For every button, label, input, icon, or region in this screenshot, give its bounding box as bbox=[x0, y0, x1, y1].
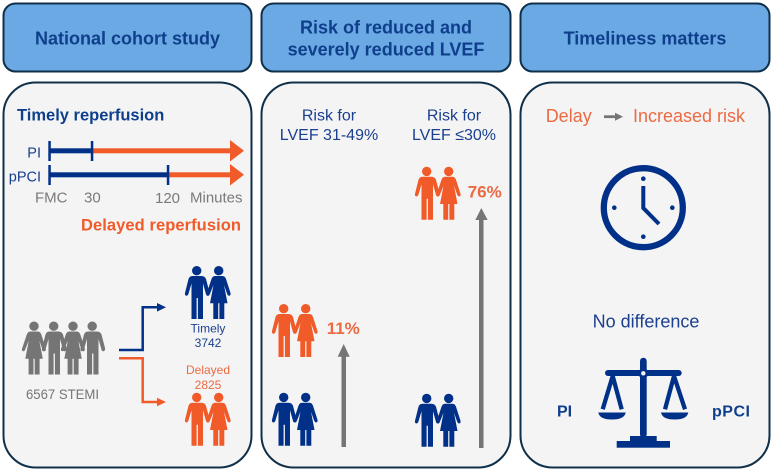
label: no difference: No difference bbox=[593, 312, 699, 332]
header: timeliness matters bbox=[520, 4, 770, 72]
heading: timely reperfusion: Timely reperfusion bbox=[17, 107, 164, 125]
label: timely 3742 bbox=[191, 322, 225, 350]
label: timely 3742: Timely bbox=[191, 322, 225, 336]
icon: 6567 STEMI group bbox=[22, 322, 105, 374]
icon: clock bbox=[604, 168, 683, 247]
icon: orange couple right bbox=[415, 167, 461, 220]
label: risk for LVEF 30% or less bbox=[412, 108, 496, 144]
label: risk for LVEF 31-49%: Risk for bbox=[302, 108, 357, 125]
timeline chart bbox=[9, 140, 244, 207]
label: pPCI: pPCI bbox=[712, 404, 750, 421]
header: risk of reduced LVEF: Risk of reduced and bbox=[300, 17, 472, 37]
icon: balance scale bbox=[598, 358, 688, 448]
arrow: to timely group bbox=[119, 303, 166, 350]
arrow: short risk increase bbox=[338, 344, 350, 447]
label: delayed 2825: Delayed bbox=[186, 363, 230, 377]
icon: blue couple right bbox=[415, 394, 461, 447]
timeline chart: 120 bbox=[155, 190, 180, 207]
label: risk for LVEF 31-49%: LVEF 31-49% bbox=[280, 127, 378, 144]
label: delayed 2825 bbox=[186, 363, 230, 392]
arrow: to delayed group bbox=[119, 358, 166, 406]
timeline chart: 30 bbox=[84, 190, 101, 207]
label: PI: PI bbox=[557, 404, 572, 421]
label: timely 3742: 3742 bbox=[195, 336, 222, 350]
value: 76%: 76% bbox=[468, 183, 502, 202]
label: 6567 STEMI: 6567 STEMI bbox=[26, 386, 99, 402]
timeline chart: Minutes bbox=[190, 190, 243, 207]
panel: risk of reduced LVEF bbox=[262, 82, 510, 468]
label: risk for LVEF 30% or less: Risk for bbox=[427, 108, 482, 125]
header: national cohort study: National cohort study bbox=[35, 28, 220, 48]
heading: delayed reperfusion: Delayed reperfusion bbox=[81, 217, 241, 235]
icon: delayed couple bbox=[185, 393, 231, 446]
icon: blue couple left bbox=[272, 393, 318, 446]
timeline chart: PI bbox=[27, 146, 41, 162]
header: timeliness matters: Timeliness matters bbox=[564, 28, 726, 48]
panel: national cohort study bbox=[4, 82, 252, 468]
arrow: long risk increase bbox=[475, 208, 488, 448]
timeline chart: FMC bbox=[35, 190, 68, 207]
icon: timely couple bbox=[185, 266, 231, 319]
header: national cohort study bbox=[4, 4, 252, 72]
icon: orange couple left bbox=[272, 304, 318, 357]
label: risk for LVEF 30% or less: LVEF ≤30% bbox=[412, 127, 496, 144]
header: risk of reduced LVEF bbox=[262, 4, 510, 72]
label: risk for LVEF 31-49% bbox=[280, 108, 378, 144]
label: increased risk: Increased risk bbox=[633, 106, 746, 126]
timeline chart: pPCI bbox=[9, 170, 41, 186]
panel: timeliness matters bbox=[520, 82, 770, 468]
arrow: delay to increased risk bbox=[604, 113, 623, 121]
label: delayed 2825: 2825 bbox=[195, 378, 222, 392]
value: 11%: 11% bbox=[327, 319, 360, 338]
header: risk of reduced LVEF: severely reduced LVEF bbox=[288, 39, 484, 59]
label: delay: Delay bbox=[546, 106, 592, 126]
